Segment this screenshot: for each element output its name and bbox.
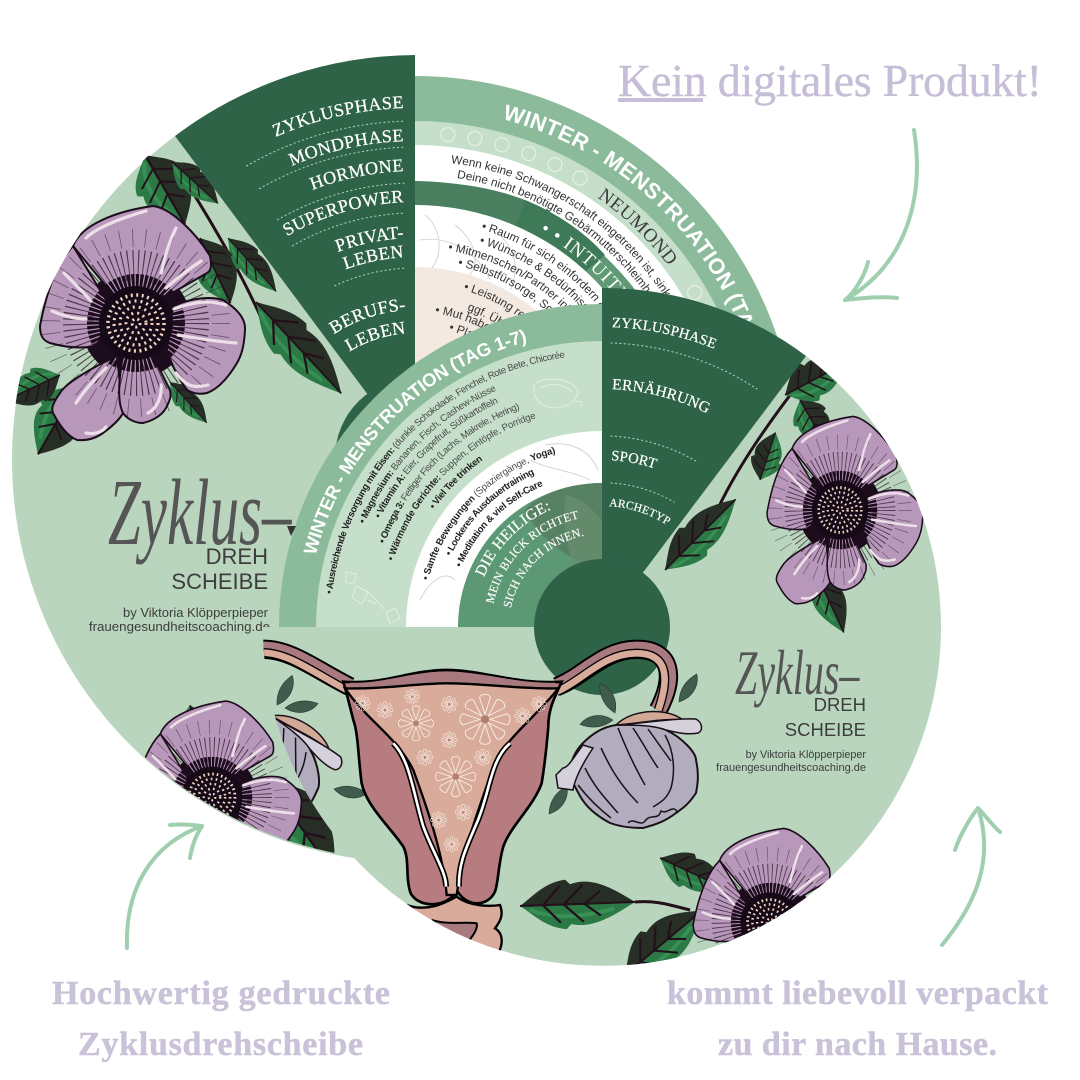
work life list: • Planung xyxy=(450,325,472,335)
right flower xyxy=(767,416,923,604)
nutrition list: • Ausreichende Versorgung mit Eisen: (dunkle Schokolade, Fenchel, Rote Bete, Chicorée xyxy=(326,352,564,594)
hub xyxy=(534,559,670,695)
uterus body xyxy=(343,670,562,904)
leaves behind the large flower xyxy=(16,156,342,455)
nutrition list: • Omega 3: Fettiger Fisch (Lachs, Makrele, Hering) xyxy=(380,403,519,542)
sector labels: HORMONE xyxy=(308,159,403,190)
back disc logo: frauengesundheitscoaching.de xyxy=(89,619,270,634)
panel: back disc xyxy=(12,55,788,858)
dark label sector xyxy=(602,288,806,627)
heading: Kein digitales Produkt! xyxy=(618,55,1042,106)
dotted dividers xyxy=(246,121,404,286)
uterus flowers xyxy=(355,689,546,852)
back hub xyxy=(335,378,495,538)
sector labels: ZYKLUSPHASE xyxy=(272,96,403,137)
bottom left flower xyxy=(144,700,334,853)
front disc logo: Zyklus– xyxy=(735,636,860,708)
dark label sector xyxy=(175,55,415,458)
small logo fragment xyxy=(287,526,296,536)
arrow: bottom right xyxy=(942,808,1000,945)
archetype text: DIE HEILIGE: xyxy=(474,502,550,577)
work life list: ggf. Überstunden xyxy=(467,304,502,322)
back disc logo: SCHEIBE xyxy=(171,569,268,594)
work life list: • Mut haben, Nein xyxy=(436,306,488,328)
caption: left xyxy=(52,975,390,1063)
nutrition list: • Vitamin A: Eier, Grapefruit, Süßkartoffeln xyxy=(376,398,498,518)
faint line art in white ring xyxy=(420,444,598,600)
cervix xyxy=(407,897,502,953)
caption: left: Zyklusdrehscheibe xyxy=(78,1026,363,1063)
work life list: • Leistung reduzieren, xyxy=(464,284,524,316)
sector labels: SPORT xyxy=(612,450,658,468)
sector labels: LEBEN xyxy=(344,322,404,352)
work life list xyxy=(436,284,524,335)
sport list: • Lockeres Ausdauertraining xyxy=(447,470,534,555)
faint line art xyxy=(420,215,515,290)
caption: left: Hochwertig gedruckte xyxy=(52,975,390,1012)
arrow: top right xyxy=(845,130,917,300)
back disc logo: by Viktoria Klöpperpieper xyxy=(123,605,269,620)
caption: right: zu dir nach Hause. xyxy=(718,1026,997,1063)
caption: right xyxy=(667,975,1049,1063)
front wheel title: WINTER - MENSTRUATION (TAG 1-7) xyxy=(303,330,526,552)
superpower: • • INTUITION xyxy=(543,226,626,289)
back disc logo: DREH xyxy=(206,544,268,569)
right bud leaves xyxy=(541,674,704,814)
window rings xyxy=(279,304,602,627)
private life list: • Selbstfürsorge, Schlaf xyxy=(458,260,552,309)
private life list xyxy=(449,224,602,309)
front disc logo: SCHEIBE xyxy=(785,719,866,740)
private life list: • Wünsche & Bedürfnisse äußern xyxy=(480,238,586,305)
nutrition list: • Magnesium: Bananen, Fisch, Cashew-Nüsse xyxy=(360,386,496,523)
dotted dividers xyxy=(611,343,757,502)
sector labels: MONDPHASE xyxy=(288,129,403,166)
back wheel title: WINTER - MENSTRUATION (TAG 1-7) xyxy=(506,104,752,322)
front disc botanical art xyxy=(163,344,923,1016)
sport list: • Meditation & viel Self-Care xyxy=(457,482,542,566)
fallopian tubes xyxy=(262,649,668,710)
lining strokes xyxy=(393,743,446,887)
nutrition list: • Viel Tee trinken xyxy=(431,456,482,508)
moon phase: NEUMOND xyxy=(598,188,676,264)
bottom right flower with leaves xyxy=(520,828,831,965)
bud leaves left xyxy=(276,675,364,798)
large flower top left xyxy=(40,206,245,440)
front disc logo: frauengesundheitscoaching.de xyxy=(716,762,866,774)
leaves right flower xyxy=(664,360,847,633)
phase description: Wenn keine Schwangerschaft eingetreten ist, sinken Östrogen xyxy=(452,155,670,294)
sector labels: ERNÄHRUNG xyxy=(612,378,710,412)
watercolor centre xyxy=(525,483,602,564)
left bud xyxy=(274,714,343,802)
caption: right: kommt liebevoll verpackt xyxy=(667,975,1049,1012)
archetype text: MEIN BLICK RICHTET xyxy=(486,510,578,604)
panel: front disc xyxy=(263,288,941,966)
back disc logo: Zyklus– xyxy=(108,461,292,566)
uterine cavity xyxy=(345,683,558,895)
phase description: Deine nicht benötigte Gebärmutterschleimhaut wird abgestoßen xyxy=(458,170,651,292)
sector labels: SUPERPOWER xyxy=(283,190,404,236)
back disc botanical art xyxy=(0,141,357,893)
front disc logo xyxy=(716,636,866,774)
uterus illustration xyxy=(262,649,668,953)
panel: front window wheel xyxy=(279,304,602,627)
arrow: bottom left xyxy=(127,825,202,948)
sector labels: BERUFS- xyxy=(328,300,405,334)
nutrition list: • Wärmende Gerichte: Suppen, Eintöpfe, Porridge xyxy=(388,414,536,560)
right bud xyxy=(556,712,702,828)
sector labels: LEBEN xyxy=(342,245,402,270)
back disc logo xyxy=(89,461,292,634)
moon dots xyxy=(441,128,715,324)
sector labels xyxy=(609,318,717,524)
private life list: • Raum für sich einfordern & Ruhe xyxy=(482,224,602,304)
front disc logo: DREH xyxy=(814,694,866,715)
icon: soup bowl xyxy=(534,379,582,408)
private life list: • Mitmenschen/Partner informieren xyxy=(449,244,572,306)
front disc base xyxy=(263,356,941,966)
front disc logo: by Viktoria Klöpperpieper xyxy=(746,749,866,761)
phase description xyxy=(452,155,670,294)
sector labels xyxy=(272,96,405,352)
window: rings of the back wheel xyxy=(415,76,788,458)
sector labels: ZYKLUSPHASE xyxy=(612,318,717,349)
archetype text: SICH NACH INNEN. xyxy=(504,528,584,608)
icon: tea bags xyxy=(346,572,400,624)
sector labels: ARCHETYP xyxy=(609,498,670,524)
sport list: • Sanfte Bewegungen (Spaziergänge, Yoga) xyxy=(424,446,555,580)
sector labels: PRIVAT- xyxy=(334,226,403,252)
back disc base xyxy=(12,136,818,863)
uterus and right bud art xyxy=(262,649,704,953)
